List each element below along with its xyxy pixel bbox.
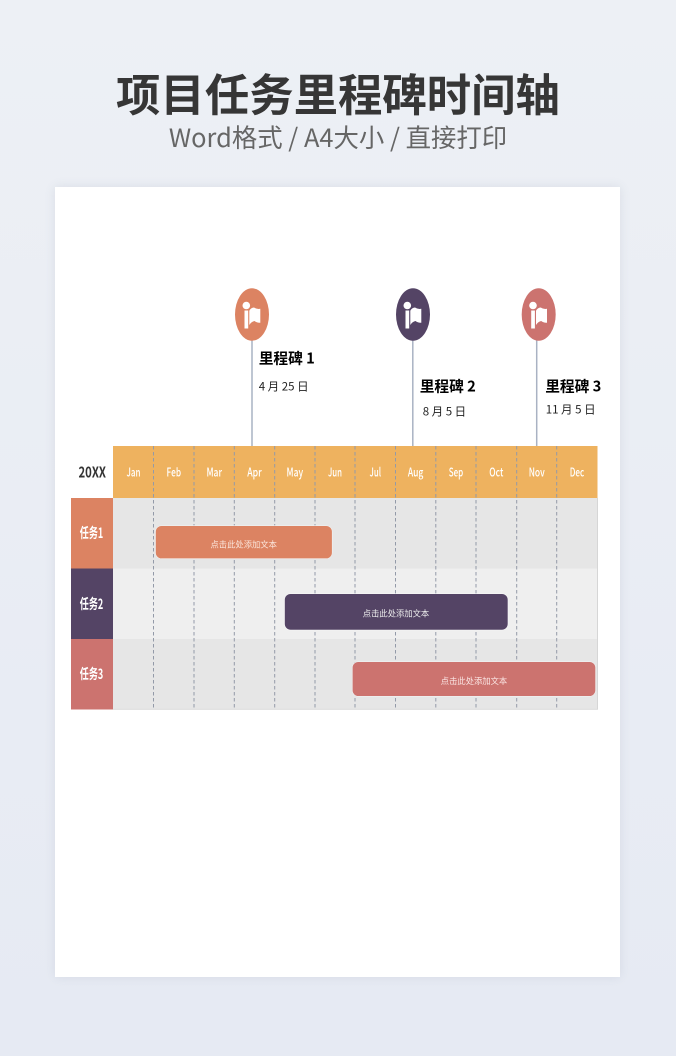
task 3 label: 任务3 <box>80 664 103 684</box>
task bar 3 <box>352 662 596 696</box>
milestone 1 date: 4 月 25 日 <box>259 378 309 394</box>
milestone 1 name: 里程碑 1 <box>259 348 315 368</box>
month labels <box>126 464 584 480</box>
subtitle: Word格式 / A4大小 / 直接打印 <box>169 119 507 155</box>
task bar 2: 点击此处添加文本 <box>363 608 429 620</box>
month labels: Nov <box>529 464 545 480</box>
row background 3 <box>113 639 598 710</box>
milestone 1 <box>235 288 315 446</box>
month labels: Apr <box>247 464 262 480</box>
milestone 2 <box>396 288 476 446</box>
row background 2 <box>113 568 598 639</box>
year label: 20XX <box>78 462 106 482</box>
task bar 2 <box>284 594 508 630</box>
panel: document page <box>55 187 620 977</box>
task bar 1 <box>156 526 332 559</box>
icon: flag badge 1 <box>235 288 269 341</box>
task bar 1: 点击此处添加文本 <box>211 538 277 550</box>
month labels: Sep <box>449 464 463 480</box>
month labels: Jun <box>328 464 342 480</box>
connector line 3 <box>536 340 538 446</box>
connector line 2 <box>412 340 414 446</box>
icon: flag badge 3 <box>522 288 556 341</box>
task 2 label: 任务2 <box>80 594 103 614</box>
task 1 label: 任务1 <box>80 523 103 543</box>
month header bar <box>113 446 598 498</box>
milestone 3 name: 里程碑 3 <box>545 376 601 396</box>
milestone 2 date: 8 月 5 日 <box>423 404 466 420</box>
task bar 3: 点击此处添加文本 <box>441 675 507 687</box>
title: 项目任务里程碑时间轴 <box>116 59 560 124</box>
milestone 3 date: 11 月 5 日 <box>546 402 596 418</box>
month labels: Dec <box>570 464 584 480</box>
month labels: Oct <box>489 464 503 480</box>
month labels: Jan <box>126 464 140 480</box>
connector line 1 <box>251 340 253 446</box>
task 1 label <box>71 498 113 568</box>
month labels: May <box>287 464 303 480</box>
month labels: Feb <box>167 464 181 480</box>
row background 1 <box>113 498 598 568</box>
task 2 label <box>71 568 113 639</box>
month labels: Aug <box>408 464 423 480</box>
task 3 label <box>71 639 113 710</box>
icon: flag badge 2 <box>396 288 430 341</box>
milestone 3 <box>522 288 601 446</box>
month labels: Mar <box>206 464 222 480</box>
milestone 2 name: 里程碑 2 <box>420 376 476 396</box>
month labels: Jul <box>370 464 381 480</box>
gantt table <box>71 446 598 710</box>
